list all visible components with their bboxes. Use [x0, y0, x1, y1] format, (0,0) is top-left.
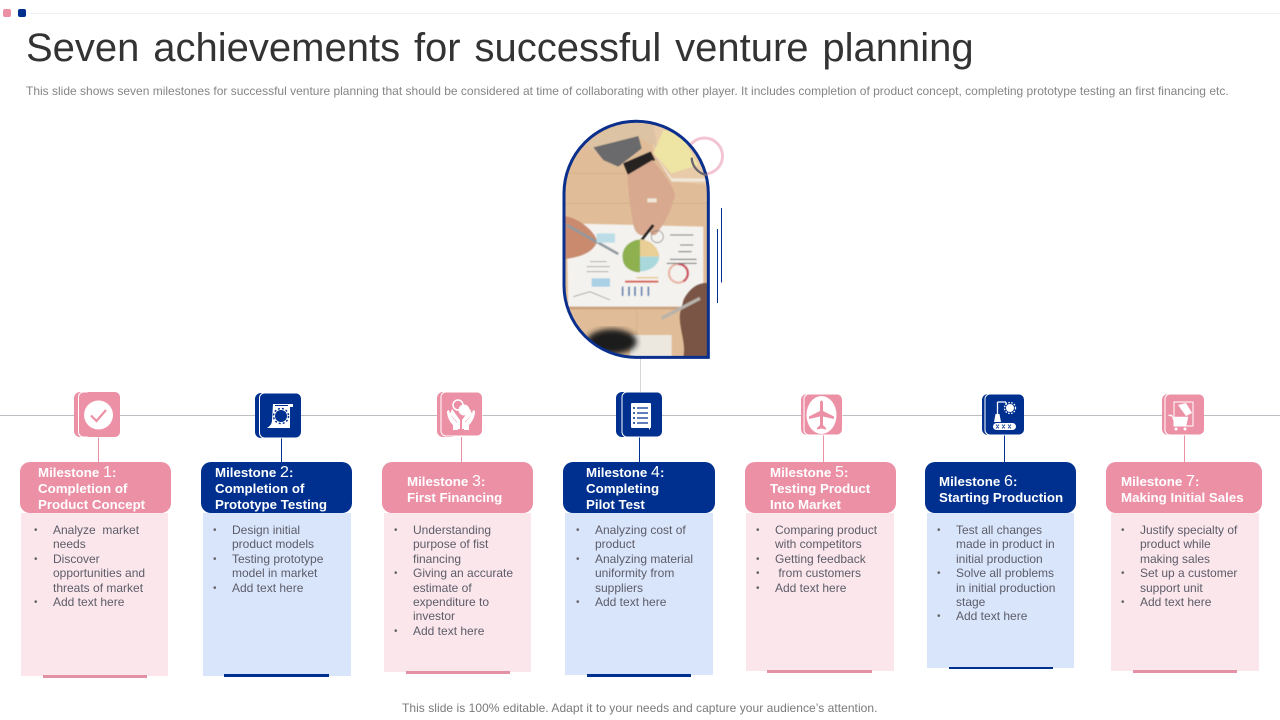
text: milestone 6 details: made in product in — [956, 537, 1055, 551]
heading: milestone 5: Testing Product — [770, 481, 870, 496]
heading: milestone 5: Into Market — [770, 497, 841, 512]
text: milestone 1 details: Analyze market — [53, 523, 139, 537]
text: milestone 7 details: product while — [1140, 537, 1211, 551]
text: milestone 4 details — [576, 523, 693, 609]
text: milestone 2 details: product models — [232, 537, 314, 551]
heading: milestone 3: Milestone 3: — [407, 473, 485, 490]
text: milestone 5 details: Comparing product — [775, 523, 877, 537]
text: milestone 7 details: Add text here — [1140, 595, 1211, 609]
icon: checklist document — [616, 392, 662, 438]
heading: milestone 7: Milestone 7: — [1121, 473, 1199, 490]
connector 4 — [639, 437, 640, 462]
panel: milestone 4 — [563, 462, 715, 677]
text: milestone 7 details: Set up a customer — [1140, 566, 1237, 580]
text: milestone 5 details: from customers — [778, 566, 861, 580]
panel: milestone 2 — [201, 462, 352, 677]
text: milestone 1 details — [34, 523, 145, 609]
connector 5 — [823, 435, 824, 462]
text: milestone 7 details: Justify specialty of — [1140, 523, 1237, 537]
text: milestone 2 details: Testing prototype — [232, 552, 323, 566]
heading: milestone 7 — [1106, 462, 1262, 513]
text: milestone 2 details: Design initial — [232, 523, 300, 537]
heading: milestone 1: Completion of — [38, 481, 127, 496]
text: milestone 3 details: Giving an accurate — [413, 566, 513, 580]
text: milestone 3 details: purpose of fist — [413, 537, 488, 551]
text: milestone 5 details: Add text here — [775, 581, 846, 595]
text: milestone 4 details: product — [595, 537, 635, 551]
connector 6 — [1004, 435, 1005, 462]
heading: milestone 6 — [925, 462, 1076, 513]
top marker: pink square — [3, 9, 11, 17]
connector 1 — [98, 437, 99, 462]
connector 7 — [1184, 435, 1185, 462]
panel: milestone 1 — [20, 462, 171, 678]
heading: milestone 2: Milestone 2: — [215, 464, 293, 481]
text: milestone 6 details: in initial production — [956, 581, 1055, 595]
icon: hands holding coins — [437, 392, 482, 437]
heading: milestone 5: Milestone 5: — [770, 464, 848, 481]
title: Seven achievements for successful venture planning — [26, 26, 974, 70]
text: milestone 6 details: Test all changes — [956, 523, 1042, 537]
timeline line — [0, 415, 1280, 416]
connector 3 — [461, 437, 462, 462]
text: milestone 6 details: initial production — [956, 552, 1043, 566]
heading: milestone 2: Prototype Testing — [215, 497, 327, 512]
icon: shopping cart with tag — [1162, 394, 1204, 436]
panel: milestone 6 — [925, 462, 1076, 669]
heading: milestone 2: Completion of — [215, 481, 304, 496]
heading: milestone 6: Milestone 6: — [939, 473, 1017, 490]
heading: milestone 4: Pilot Test — [586, 497, 645, 512]
text: milestone 3 details — [394, 523, 513, 638]
text: milestone 1 details: needs — [53, 537, 86, 551]
text: milestone 3 details: estimate of — [413, 581, 472, 595]
text: milestone 3 details: financing — [413, 552, 461, 566]
text: milestone 1 details: Discover — [53, 552, 100, 566]
text: milestone 7 details — [1121, 523, 1238, 609]
heading: milestone 6: Starting Production — [939, 490, 1063, 505]
connector 2 — [281, 437, 282, 462]
text: milestone 4 details: Analyzing material — [595, 552, 693, 566]
footer note: This slide is 100% editable. Adapt it to your needs and capture your audience’s attention. — [402, 701, 877, 715]
decorative pink ring — [690, 136, 724, 176]
photo: hands over business charts — [562, 120, 710, 359]
text: milestone 5 details — [756, 523, 877, 595]
heading: milestone 1: Product Concept — [38, 497, 145, 512]
panel: milestone 5 — [745, 462, 896, 673]
panel: milestone 7 — [1106, 462, 1262, 673]
text: milestone 1 details: opportunities and — [53, 566, 145, 580]
icon: airplane — [801, 394, 842, 436]
text: milestone 5 details: with competitors — [775, 537, 862, 551]
text: milestone 7 details: making sales — [1140, 552, 1210, 566]
heading: milestone 1 — [20, 462, 171, 513]
text: milestone 1 details: Add text here — [53, 595, 124, 609]
subtitle: This slide shows seven milestones for successful venture planning that should be considered at time of collaborating with other player. It includes completion of product concept, completing prototype testing an first financing etc. — [26, 84, 1229, 98]
heading: milestone 4: Milestone 4: — [586, 464, 664, 481]
heading: milestone 4: Completing — [586, 481, 659, 496]
text: milestone 3 details: investor — [413, 609, 455, 623]
text: milestone 6 details: stage — [956, 595, 985, 609]
icon: scroll with gear — [255, 393, 301, 438]
text: milestone 2 details — [213, 523, 323, 595]
icon: check mark — [74, 392, 120, 438]
text: milestone 3 details: expenditure to — [413, 595, 489, 609]
icon: conveyor with gear — [982, 394, 1024, 436]
top marker: navy square — [18, 9, 26, 17]
decorative accent lines — [717, 208, 722, 303]
text: milestone 4 details: Add text here — [595, 595, 666, 609]
text: milestone 3 details: Understanding — [413, 523, 491, 537]
text: milestone 3 details: Add text here — [413, 624, 484, 638]
text: milestone 4 details: suppliers — [595, 581, 643, 595]
text: milestone 5 details: Getting feedback — [775, 552, 866, 566]
text: milestone 6 details: Add text here — [956, 609, 1027, 623]
text: milestone 2 details: Add text here — [232, 581, 303, 595]
heading: milestone 3 — [382, 462, 533, 513]
text: milestone 4 details: uniformity from — [595, 566, 674, 580]
text: milestone 2 details: model in market — [232, 566, 317, 580]
heading: milestone 1: Milestone 1: — [38, 464, 116, 481]
text: milestone 7 details: support unit — [1140, 581, 1203, 595]
heading: milestone 3: First Financing — [407, 490, 502, 505]
text: milestone 1 details: threats of market — [53, 581, 143, 595]
heading: milestone 7: Making Initial Sales — [1121, 490, 1244, 505]
heading: milestone 2 — [201, 462, 352, 513]
text: milestone 4 details: Analyzing cost of — [595, 523, 686, 537]
panel: milestone 3 — [382, 462, 533, 674]
text: milestone 6 details: Solve all problems — [956, 566, 1054, 580]
heading: milestone 4 — [563, 462, 715, 513]
text: milestone 6 details — [937, 523, 1055, 623]
heading: milestone 5 — [745, 462, 896, 513]
